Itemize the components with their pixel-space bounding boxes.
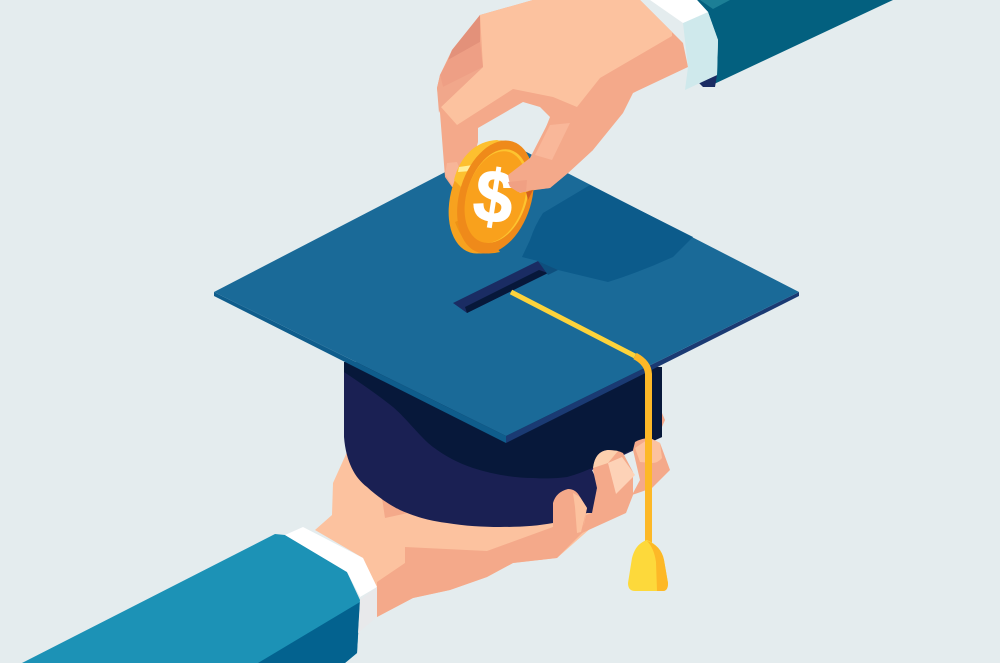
dollar sign: $ — [468, 154, 520, 241]
upper arm: sleeve and cuff — [650, 0, 893, 90]
lower hand: fingers gripping cap — [520, 438, 670, 560]
finger three — [632, 438, 670, 495]
lower arm: sleeve and cuff — [22, 527, 377, 663]
thumb over coin — [508, 123, 593, 193]
coin slot — [453, 261, 558, 313]
cap body — [344, 362, 662, 527]
tassel: cord and tuft — [511, 292, 668, 591]
mortarboard top — [214, 141, 799, 436]
hand shadow on board — [522, 185, 693, 282]
mortarboard edge — [214, 292, 506, 443]
lower hand: palm behind cap — [315, 413, 665, 617]
cap body shadow — [344, 362, 662, 478]
finger one — [520, 489, 587, 560]
graduation cap — [214, 141, 799, 527]
finger two — [582, 450, 633, 533]
upper hand — [437, 0, 688, 193]
coin with dollar sign — [436, 131, 547, 263]
